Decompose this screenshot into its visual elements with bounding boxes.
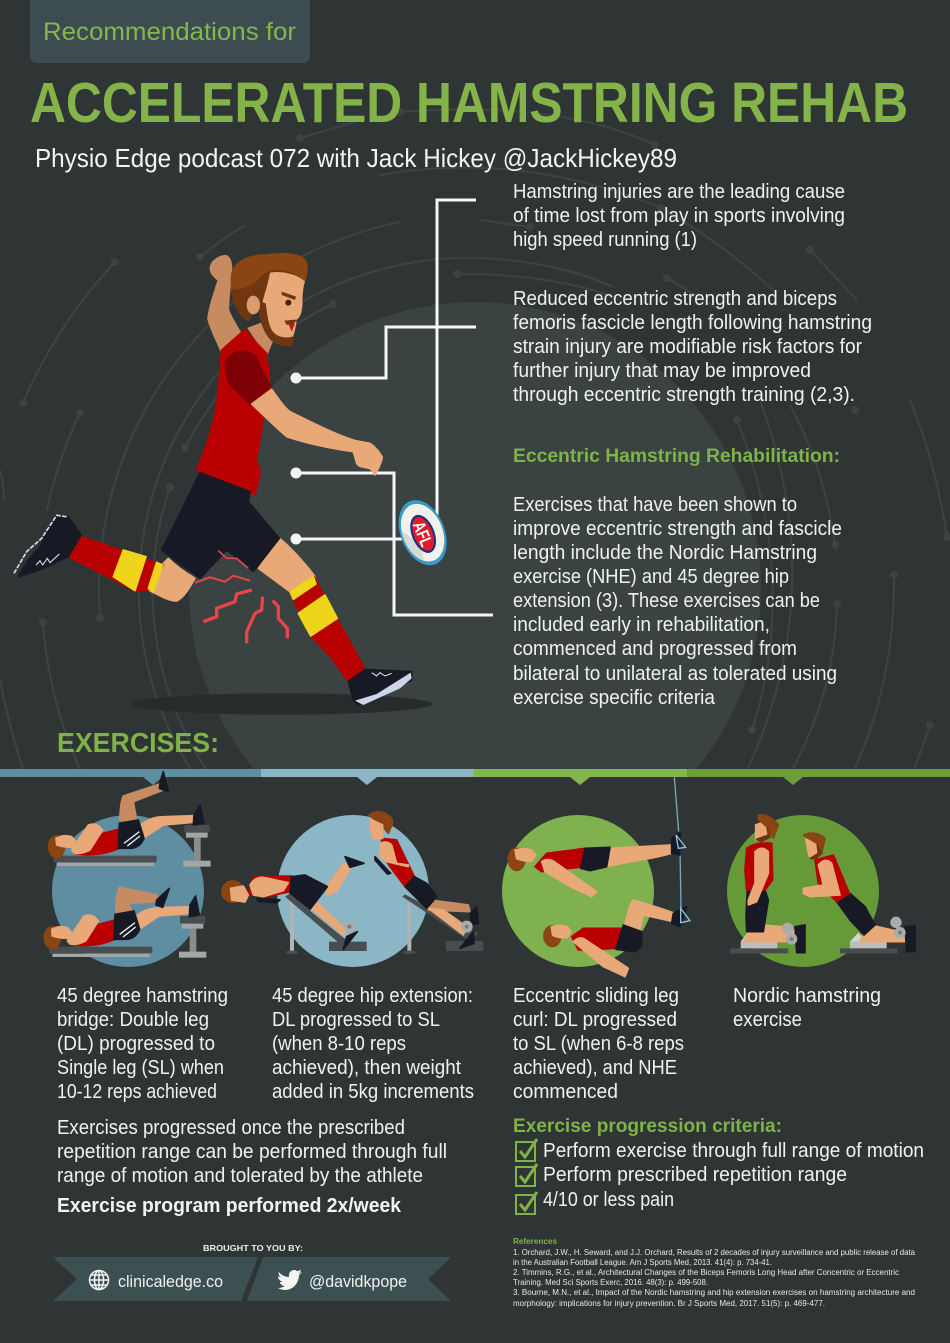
references: in the Australian Football League. Am J Sports Med, 2013. 41(4): p. 734-41. xyxy=(513,1258,772,1267)
extended leg figure xyxy=(508,832,686,897)
pain lines xyxy=(195,551,287,643)
heading: eccentric rehabilitation: Eccentric Hamstring Rehabilitation: xyxy=(513,446,840,467)
progression paragraph: repetition range can be performed through full xyxy=(57,1141,447,1163)
caption: sliding leg curl: achieved), and NHE xyxy=(513,1057,677,1079)
icon: twitter bird xyxy=(278,1270,302,1290)
front arm xyxy=(252,389,382,475)
raised figure on bench xyxy=(369,812,483,954)
rehabilitation text: extension (3). These exercises can be xyxy=(513,590,820,612)
exercise circles xyxy=(52,815,879,967)
caption: nordic hamstring: Nordic hamstring xyxy=(733,985,881,1007)
lower bridge figure xyxy=(44,887,206,958)
rehabilitation text: Exercises that have been shown to xyxy=(513,494,797,516)
exercise 1: hamstring bridge figures xyxy=(44,772,211,958)
rehabilitation text: exercise specific criteria xyxy=(513,687,716,709)
rehabilitation text: bilateral to unilateral as tolerated using xyxy=(513,663,837,685)
shirt sleeve xyxy=(226,351,271,404)
icon: globe xyxy=(90,1270,108,1290)
cable xyxy=(674,777,681,908)
caption: hamstring bridge: bridge: Double leg xyxy=(57,1009,209,1031)
references: Training. Med Sci Sports Exerc, 2016. 48(3): p. 499-508. xyxy=(513,1278,708,1287)
caption: hip extension: added in 5kg increments xyxy=(272,1081,474,1103)
football xyxy=(390,493,456,572)
head xyxy=(231,254,307,346)
caption: sliding leg curl: curl: DL progressed xyxy=(513,1009,677,1031)
ribbon: twitter: @davidkpope xyxy=(309,1272,407,1291)
criteria checklist: Perform exercise through full range of motion xyxy=(543,1140,924,1162)
exercise 2: 45 degree hip extension figures xyxy=(222,812,483,954)
brought to you by label: BROUGHT TO YOU BY: xyxy=(203,1243,303,1253)
background lighter circle xyxy=(189,302,761,769)
references: 1. Orchard, J.W., H. Seward, and J.J. Orchard, Results of 2 decades of injury surveillance and public release of data xyxy=(513,1248,916,1257)
football: AFL xyxy=(409,519,437,550)
criteria checklist: Perform prescribed repetition range xyxy=(543,1164,847,1186)
rehabilitation text xyxy=(513,494,842,709)
caption: nordic hamstring xyxy=(733,985,881,1031)
progression paragraph: range of motion and tolerated by the athlete xyxy=(57,1165,423,1187)
connector lines xyxy=(290,200,493,615)
caption: hamstring bridge: 10-12 reps achieved xyxy=(57,1081,217,1103)
rear leg xyxy=(14,515,195,601)
ribbon: website xyxy=(53,1257,258,1301)
leaning kneeling figure xyxy=(803,833,915,953)
caption: hamstring bridge: (DL) progressed to xyxy=(57,1033,215,1055)
rehabilitation text: length include the Nordic Hamstring xyxy=(513,542,817,564)
caption: sliding leg curl: commenced xyxy=(513,1081,618,1103)
header tab: Recommendations for xyxy=(43,18,296,46)
shirt xyxy=(197,329,270,495)
caption: nordic hamstring: exercise xyxy=(733,1009,802,1031)
rehabilitation text: exercise (NHE) and 45 degree hip xyxy=(513,566,789,588)
program frequency: Exercise program performed 2x/week xyxy=(57,1195,402,1217)
intro text: of time lost from play in sports involving xyxy=(513,205,845,227)
lowered figure on bench xyxy=(222,857,367,954)
caption: hip extension: achieved), then weight xyxy=(272,1057,461,1079)
risk factors text: Reduced eccentric strength and biceps xyxy=(513,288,837,310)
references: morphology: implications for injury prevention. Br J Sports Med, 2017. 51(5): p. 469-477. xyxy=(513,1299,825,1308)
criteria checklist xyxy=(516,1139,924,1214)
caption: sliding leg curl: Eccentric sliding leg xyxy=(513,985,679,1007)
upright kneeling figure xyxy=(730,815,805,953)
caption: hamstring bridge: 45 degree hamstring xyxy=(57,985,228,1007)
coloured exercise band xyxy=(0,769,950,785)
progression paragraph: Exercises progressed once the prescribed xyxy=(57,1117,405,1139)
curled leg figure xyxy=(544,900,690,977)
upper bridge figure xyxy=(49,772,211,867)
rehabilitation text: commenced and progressed from xyxy=(513,638,797,660)
intro text: Hamstring injuries are the leading cause xyxy=(513,181,845,203)
criteria checklist: 4/10 or less pain xyxy=(543,1189,674,1211)
intro text xyxy=(513,181,845,251)
heading: progression criteria: Exercise progression criteria: xyxy=(513,1116,782,1137)
ribbon: website: clinicaledge.co xyxy=(118,1272,223,1291)
references xyxy=(513,1237,916,1308)
front leg xyxy=(258,538,412,705)
risk factors text: strain injury are modifiable risk factors for xyxy=(513,336,862,358)
shorts xyxy=(162,473,279,578)
references: References xyxy=(513,1237,558,1246)
caption: hamstring bridge: Single leg (SL) when xyxy=(57,1057,224,1079)
subtitle: Physio Edge podcast 072 with Jack Hickey @JackHickey89 xyxy=(35,143,677,173)
rehabilitation text: included early in rehabilitation, xyxy=(513,614,770,636)
neck xyxy=(248,323,273,355)
ribbon: twitter xyxy=(247,1257,451,1301)
references: 3. Bourne, M.N., et al., Impact of the Nordic hamstring and hip extension exercises on hamstring architecture and xyxy=(513,1288,915,1297)
header tab xyxy=(30,0,310,63)
caption: hip extension: 45 degree hip extension: xyxy=(272,985,473,1007)
risk factors text xyxy=(513,288,872,406)
football player illustration xyxy=(14,254,456,715)
references: 2. Timmins, R.G., et al., Architectural Changes of the Biceps Femoris Long Head after Concentric or Eccentric xyxy=(513,1268,899,1277)
exercise 4: nordic hamstring figures xyxy=(730,815,915,953)
ground shadow xyxy=(131,693,432,715)
caption: hip extension xyxy=(272,985,474,1103)
caption: sliding leg curl: to SL (when 6-8 reps xyxy=(513,1033,684,1055)
raised arm xyxy=(208,256,240,353)
risk factors text: further injury that may be improved xyxy=(513,360,811,382)
risk factors text: femoris fascicle length following hamstring xyxy=(513,312,872,334)
caption: hip extension: (when 8-10 reps xyxy=(272,1033,406,1055)
rehabilitation text: improve eccentric strength and fascicle xyxy=(513,518,842,540)
risk factors text: through eccentric strength training (2,3). xyxy=(513,384,855,406)
caption: hip extension: DL progressed to SL xyxy=(272,1009,440,1031)
heading: exercises: EXERCISES: xyxy=(57,727,219,758)
progression paragraph xyxy=(57,1117,447,1187)
exercise 3: eccentric sliding leg curl figures xyxy=(508,777,690,977)
intro text: high speed running (1) xyxy=(513,229,697,251)
caption: sliding leg curl xyxy=(513,985,684,1103)
caption: hamstring bridge xyxy=(57,985,228,1103)
